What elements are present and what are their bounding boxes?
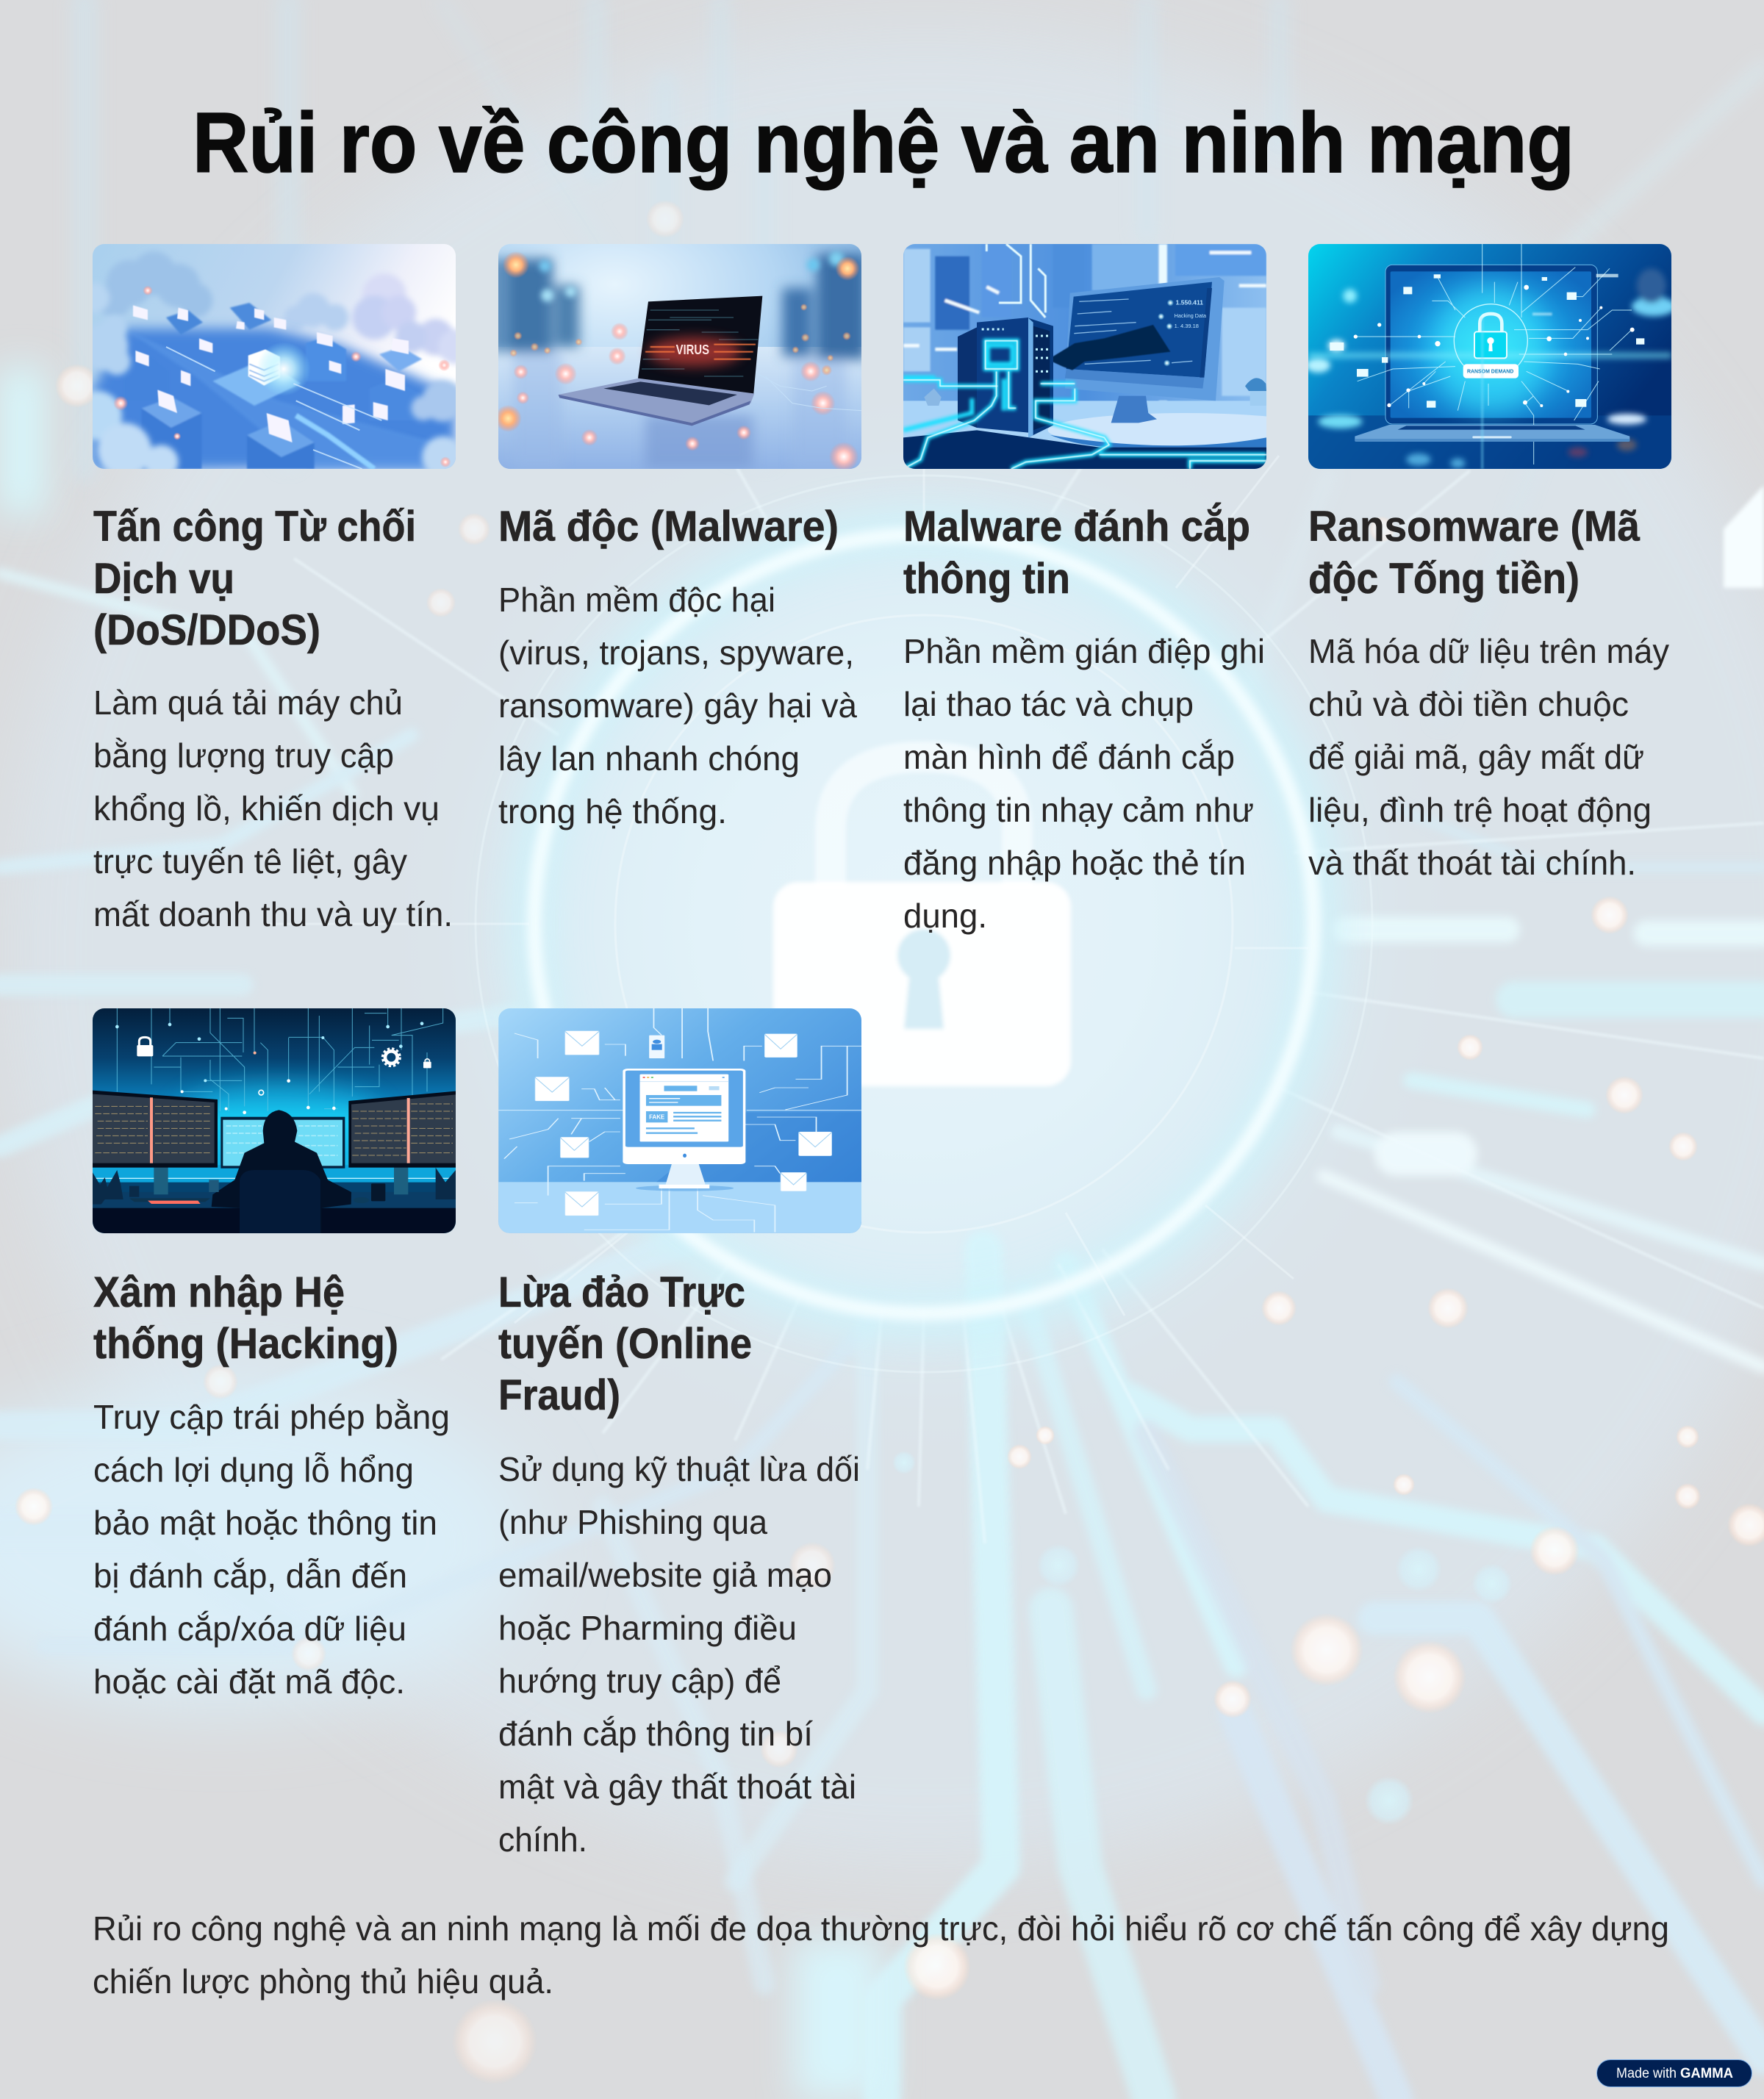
- heading: độc Tống tiền): [1308, 555, 1580, 603]
- body text: hướng truy cập) để: [498, 1662, 781, 1700]
- image: server and monitor with hand: Hacking Data: [1175, 314, 1206, 319]
- body text: Truy cập trái phép bằng: [93, 1398, 450, 1436]
- body text: đánh cắp/xóa dữ liệu: [93, 1610, 406, 1648]
- image: fake website and emails: FAKE: [649, 1113, 664, 1121]
- body text: cách lợi dụng lỗ hổng: [93, 1451, 414, 1489]
- image: fake website and emails: [498, 1008, 861, 1233]
- body text: trong hệ thống.: [498, 792, 727, 830]
- body text: chính.: [498, 1820, 587, 1859]
- image: laptop with virus: [491, 244, 866, 471]
- body text: chủ và đòi tiền chuộc: [1308, 685, 1629, 723]
- body text: Phần mềm độc hại: [498, 581, 775, 619]
- body text: email/website giả mạo: [498, 1556, 832, 1594]
- heading: [93, 503, 416, 654]
- body text: Làm quá tải máy chủ: [93, 683, 403, 722]
- background: ring: [265, 250, 1372, 1372]
- body text: [903, 632, 1265, 935]
- heading: Xâm nhập Hệ: [93, 1269, 345, 1316]
- badge: Made with Gamma: GAMMA: [1680, 2066, 1733, 2081]
- conclusion text: chiến lược phòng thủ hiệu quả.: [93, 1962, 553, 2001]
- panel: Lừa đảo Trực tuyến: [498, 1008, 861, 1859]
- heading: [93, 1269, 398, 1368]
- heading: thông tin: [903, 555, 1070, 603]
- title: Rủi ro về công nghệ và an ninh mạng: [193, 95, 1574, 190]
- body text: Mã hóa dữ liệu trên máy: [1308, 632, 1669, 670]
- background: thick circuit traces: [0, 573, 1764, 2099]
- image: laptop with padlock: [1306, 244, 1676, 469]
- body text: và thất thoát tài chính.: [1308, 844, 1636, 882]
- image: server and monitor with hand: 1. 4.39.18: [1175, 324, 1199, 329]
- heading: (DoS/DDoS): [93, 606, 320, 654]
- heading: Malware đánh cắp: [903, 503, 1250, 550]
- heading: [903, 503, 1250, 603]
- body text: liệu, đình trệ hoạt động: [1308, 791, 1652, 829]
- background: broad bottom glow: [794, 1940, 882, 2099]
- body text: Sử dụng kỹ thuật lừa dối: [498, 1450, 860, 1488]
- background: left edge glow: [0, 367, 44, 514]
- panel: Ransomware: [1306, 244, 1676, 882]
- background: padlock: [773, 757, 1071, 1086]
- conclusion text: Rủi ro công nghệ và an ninh mạng là mối đe dọa thường trực, đòi hỏi hiểu rõ cơ chế tấn công để xây dựng: [93, 1909, 1669, 1948]
- background: faint top lines: [85, 0, 1764, 720]
- body text: hoặc cài đặt mã độc.: [93, 1662, 405, 1701]
- body text: trực tuyến tê liệt, gây: [93, 842, 407, 880]
- body text: thông tin nhạy cảm như: [903, 791, 1254, 829]
- image: hooded hacker at monitors: [93, 1008, 456, 1233]
- body text: lây lan nhanh chóng: [498, 739, 800, 778]
- body text: bằng lượng truy cập: [93, 736, 394, 775]
- heading: Fraud): [498, 1371, 620, 1419]
- body text: khổng lồ, khiến dịch vụ: [93, 789, 440, 828]
- body text: hoặc Pharming điều: [498, 1609, 797, 1647]
- background: bright right block: [1724, 485, 1764, 588]
- body text: [93, 683, 453, 933]
- conclusion text: [93, 1909, 1669, 2001]
- image: laptop with padlock: RANSOM DEMAND: [1467, 370, 1513, 375]
- panel: Xâm nhập Hệ thống: [93, 1008, 456, 1701]
- body text: [498, 581, 857, 830]
- body text: Phần mềm gián điệp ghi: [903, 632, 1265, 670]
- heading: thống (Hacking): [93, 1320, 398, 1368]
- heading: tuyến (Online: [498, 1320, 752, 1368]
- body text: bị đánh cắp, dẫn đến: [93, 1557, 407, 1595]
- image: laptop with virus: VIRUS: [676, 342, 709, 357]
- heading: [498, 1269, 752, 1419]
- body text: đánh cắp thông tin bí: [498, 1715, 813, 1753]
- body text: lại thao tác và chụp: [903, 685, 1194, 723]
- image: cloud network city: [93, 244, 456, 469]
- body text: [93, 1398, 450, 1701]
- heading: Dịch vụ: [93, 555, 234, 603]
- badge: Made with Gamma: [1596, 2059, 1752, 2087]
- panel: Mã độc: [491, 244, 866, 830]
- heading: Ransomware (Mã: [1308, 503, 1641, 550]
- heading: Mã độc (Malware): [498, 503, 839, 550]
- body text: (virus, trojans, spyware,: [498, 634, 854, 672]
- body text: [1308, 632, 1669, 882]
- body text: màn hình để đánh cắp: [903, 738, 1235, 776]
- body text: dụng.: [903, 897, 987, 935]
- panel: Tấn công Từ chối Dịch vụ: [73, 244, 473, 933]
- image: server and monitor with hand: 1.550.411: [1176, 299, 1203, 306]
- body text: ransomware) gây hại và: [498, 686, 857, 725]
- body text: để giải mã, gây mất dữ: [1308, 738, 1644, 776]
- badge: Made with Gamma: Made with: [1616, 2066, 1677, 2081]
- body text: [498, 1450, 860, 1859]
- heading: [1308, 503, 1641, 603]
- panel: Malware đánh cắp thông tin: [903, 244, 1266, 935]
- body text: mất doanh thu và uy tín.: [93, 895, 453, 933]
- heading: Tấn công Từ chối: [93, 503, 416, 550]
- heading: Lừa đảo Trực: [498, 1269, 745, 1316]
- body text: mật và gây thất thoát tài: [498, 1768, 856, 1806]
- body text: đăng nhập hoặc thẻ tín: [903, 844, 1246, 882]
- background: fine rays: [294, 294, 1764, 1543]
- body text: bảo mật hoặc thông tin: [93, 1504, 437, 1542]
- body text: (như Phishing qua: [498, 1503, 767, 1541]
- image: server and monitor with hand: [903, 244, 1322, 469]
